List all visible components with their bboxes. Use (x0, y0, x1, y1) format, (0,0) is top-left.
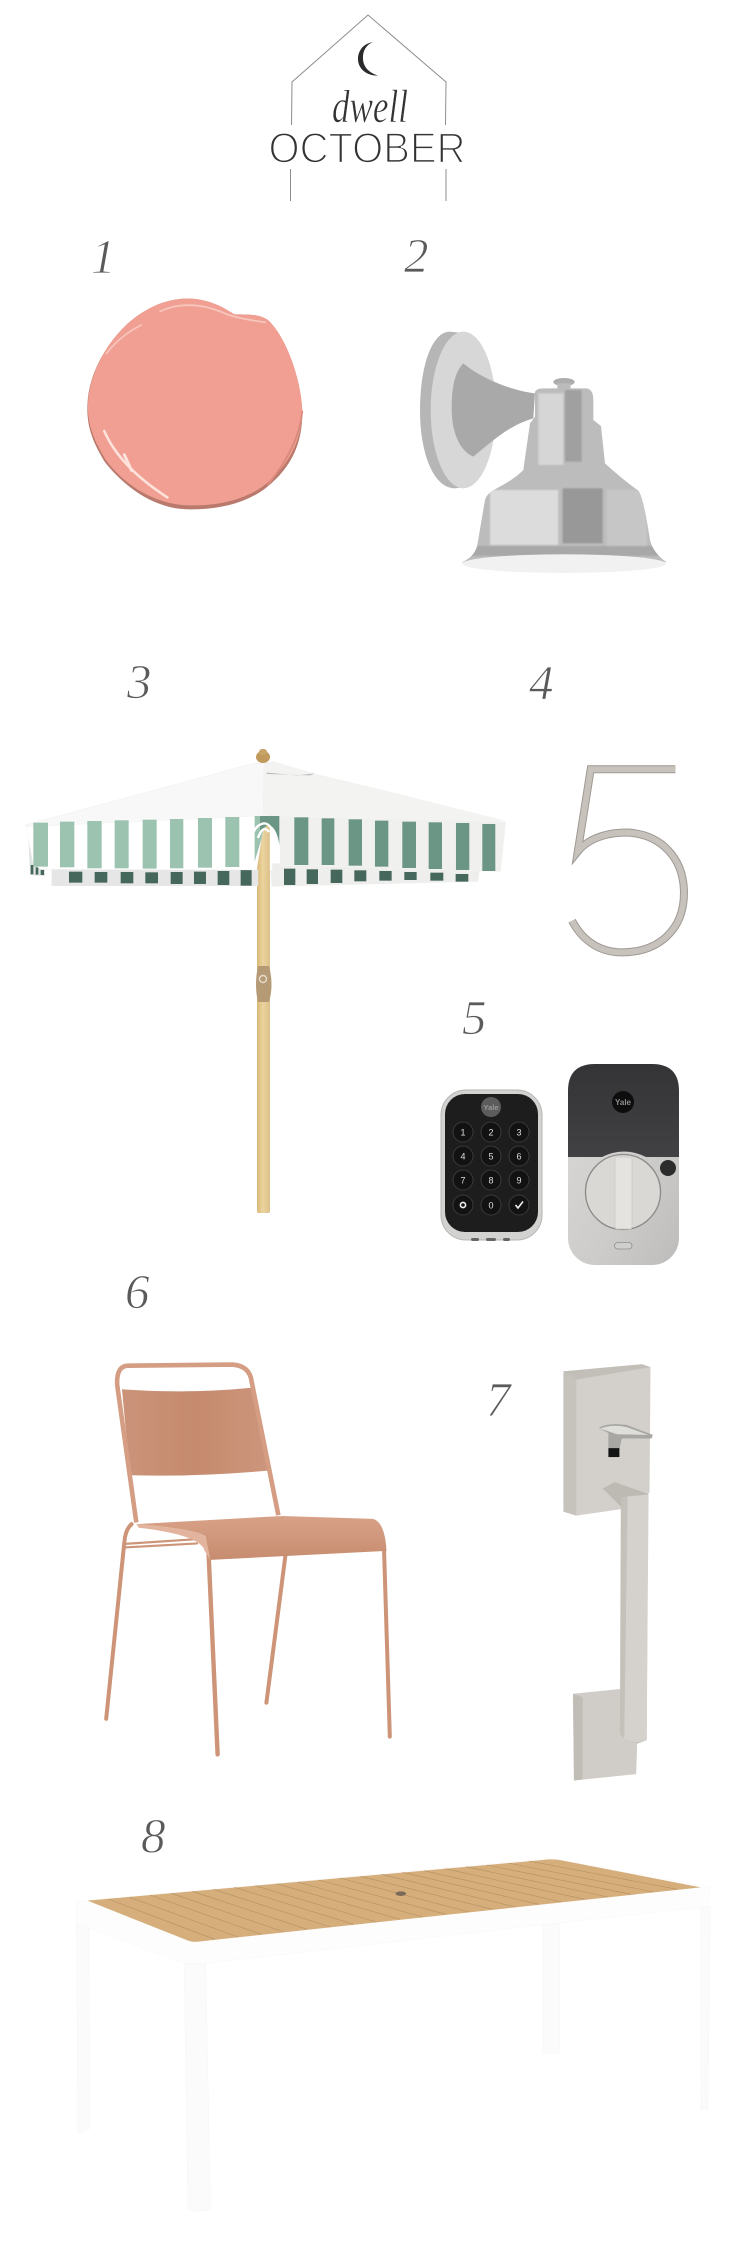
lamp backplate (420, 332, 496, 488)
keypad buttons: 5 (488, 1152, 494, 1162)
keypad buttons: 3 (516, 1128, 522, 1138)
lock logo: Yale (615, 1098, 632, 1107)
icon: crescent moon (358, 42, 378, 76)
keypad buttons (453, 1122, 529, 1215)
lock logo (612, 1091, 634, 1113)
umbrella right panel (260, 762, 506, 887)
keypad buttons: 8 (488, 1176, 494, 1186)
number 7: 7 (486, 1372, 513, 1427)
number 4: 4 (529, 655, 554, 710)
item 5: smart lock (568, 1064, 679, 1265)
umbrella left panel (25, 763, 271, 886)
chair legs (106, 1524, 390, 1754)
item 3: striped patio umbrella (25, 749, 506, 1213)
handle top plate (563, 1364, 650, 1516)
number 8: 8 (141, 1808, 166, 1863)
umbrella pole (256, 749, 272, 1213)
number 5: 5 (462, 990, 486, 1045)
handle bottom plate (573, 1688, 637, 1781)
title: dwell October logo (268, 15, 466, 201)
keypad logo: Yale (483, 1103, 499, 1112)
chair seat (136, 1516, 386, 1560)
item 5: keypad (441, 1090, 542, 1241)
month heading: OCTOBER (268, 125, 466, 173)
lamp shade (460, 378, 673, 573)
keypad buttons: 0 (488, 1200, 494, 1210)
item 1: paint swatch (87, 299, 302, 509)
item 8: outdoor dining table (77, 1858, 710, 2212)
item 4: modern house number five (572, 769, 684, 952)
number 2: 2 (404, 228, 428, 283)
house outline (290, 15, 446, 201)
lamp arm (452, 363, 535, 457)
script word dwell: dwell (332, 81, 408, 133)
handle thumb lever (599, 1424, 653, 1457)
keypad buttons: 2 (488, 1128, 494, 1138)
lock thumb turn (586, 1154, 660, 1230)
keypad buttons: 7 (460, 1176, 466, 1186)
number 1: 1 (91, 229, 116, 284)
keypad buttons: 1 (460, 1128, 466, 1138)
number 6: 6 (125, 1264, 150, 1319)
keypad buttons: 9 (516, 1176, 522, 1186)
table apron (77, 1858, 710, 1963)
item 6: terracotta metal chair (106, 1365, 390, 1754)
item 7: door handle (563, 1364, 653, 1781)
number 3: 3 (126, 654, 152, 709)
table legs (77, 1907, 710, 2212)
keypad logo (481, 1097, 501, 1117)
handle grip (603, 1482, 649, 1744)
keypad buttons: 6 (516, 1152, 522, 1162)
table top (88, 1859, 701, 1942)
umbrella arch trim (245, 823, 271, 870)
item 2: galvanized barn light (420, 332, 673, 573)
chair backrest (117, 1365, 278, 1522)
keypad buttons: 4 (460, 1152, 466, 1162)
